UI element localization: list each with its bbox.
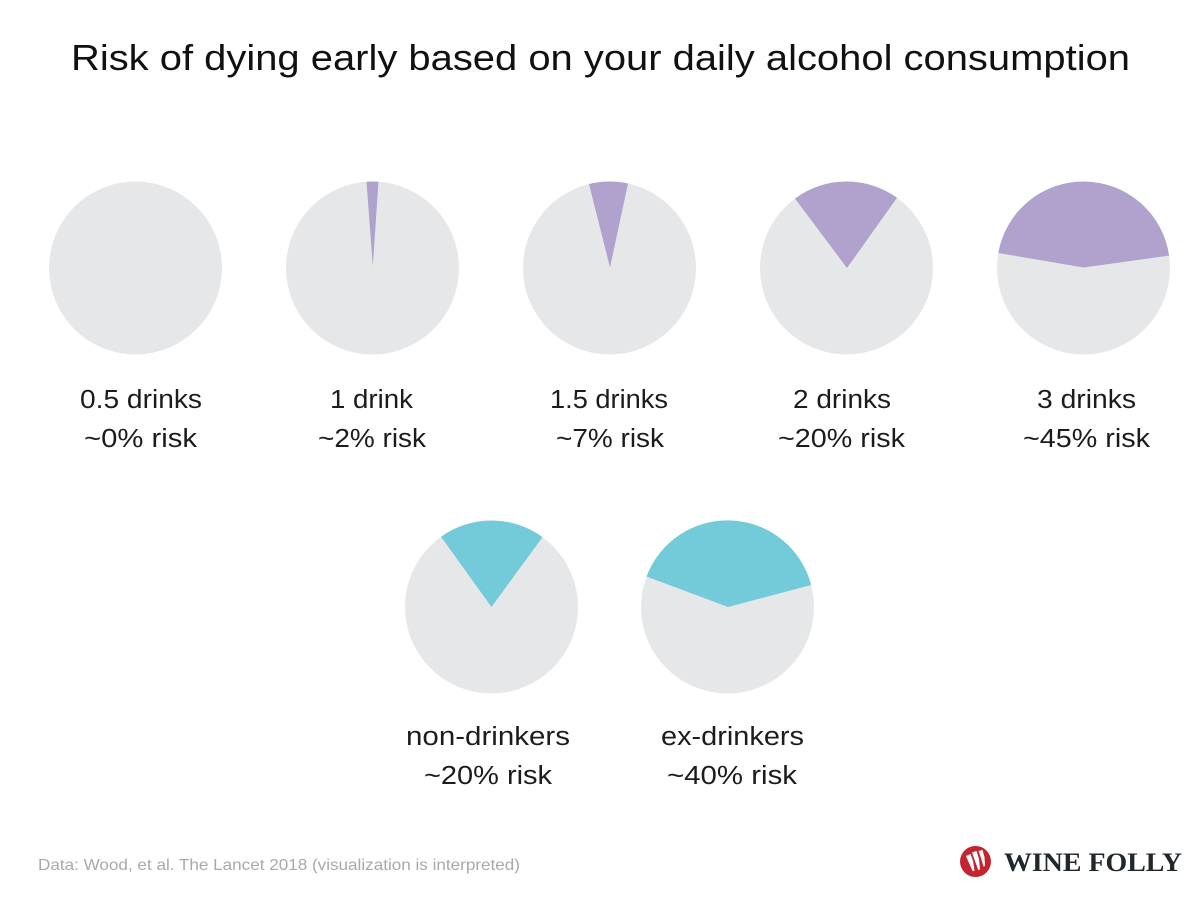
label: 3 drinks: 3 drinks <box>1037 386 1136 414</box>
pie: non-drinkers <box>405 520 578 694</box>
pie: ex-drinkers <box>641 520 814 694</box>
label: 0.5 drinks: 0.5 drinks <box>80 386 202 414</box>
wordmark: WINE FOLLY <box>1004 848 1182 877</box>
label: non-drinkers: ~20% risk <box>424 762 552 790</box>
label: 2 drinks <box>778 386 905 453</box>
label: non-drinkers: non-drinkers <box>406 723 570 751</box>
label: 1 drink: 1 drink <box>330 386 413 414</box>
label: ex-drinkers: ~40% risk <box>667 762 797 790</box>
label: 1 drink: ~2% risk <box>318 425 426 453</box>
source note: Data: Wood, et al. The Lancet 2018 (visualization is interpreted) <box>38 857 520 874</box>
label: 3 drinks <box>1023 386 1150 453</box>
pie: 1 drink <box>286 181 459 354</box>
label: 0.5 drinks: ~0% risk <box>84 425 197 453</box>
icon: bottles in red circle <box>960 846 991 877</box>
pie: 0.5 drinks <box>49 182 222 354</box>
pie: 1.5 drinks <box>523 182 696 354</box>
label: 1.5 drinks: ~7% risk <box>556 425 664 453</box>
label: 1 drink <box>318 386 426 453</box>
logo: Wine Folly <box>960 846 1182 877</box>
label: 1.5 drinks <box>550 386 668 453</box>
label: 2 drinks: ~20% risk <box>778 425 905 453</box>
label: 0.5 drinks <box>80 386 202 453</box>
pie: 2 drinks <box>760 182 933 354</box>
label: non-drinkers <box>406 723 570 790</box>
label: ex-drinkers <box>661 723 804 790</box>
pie: 3 drinks <box>997 181 1170 354</box>
label: 2 drinks: 2 drinks <box>793 386 891 414</box>
label: 3 drinks: ~45% risk <box>1023 425 1150 453</box>
title: Risk of dying early based on your daily alcohol consumption <box>71 37 1130 78</box>
label: ex-drinkers: ex-drinkers <box>661 723 804 751</box>
label: 1.5 drinks: 1.5 drinks <box>550 386 668 414</box>
